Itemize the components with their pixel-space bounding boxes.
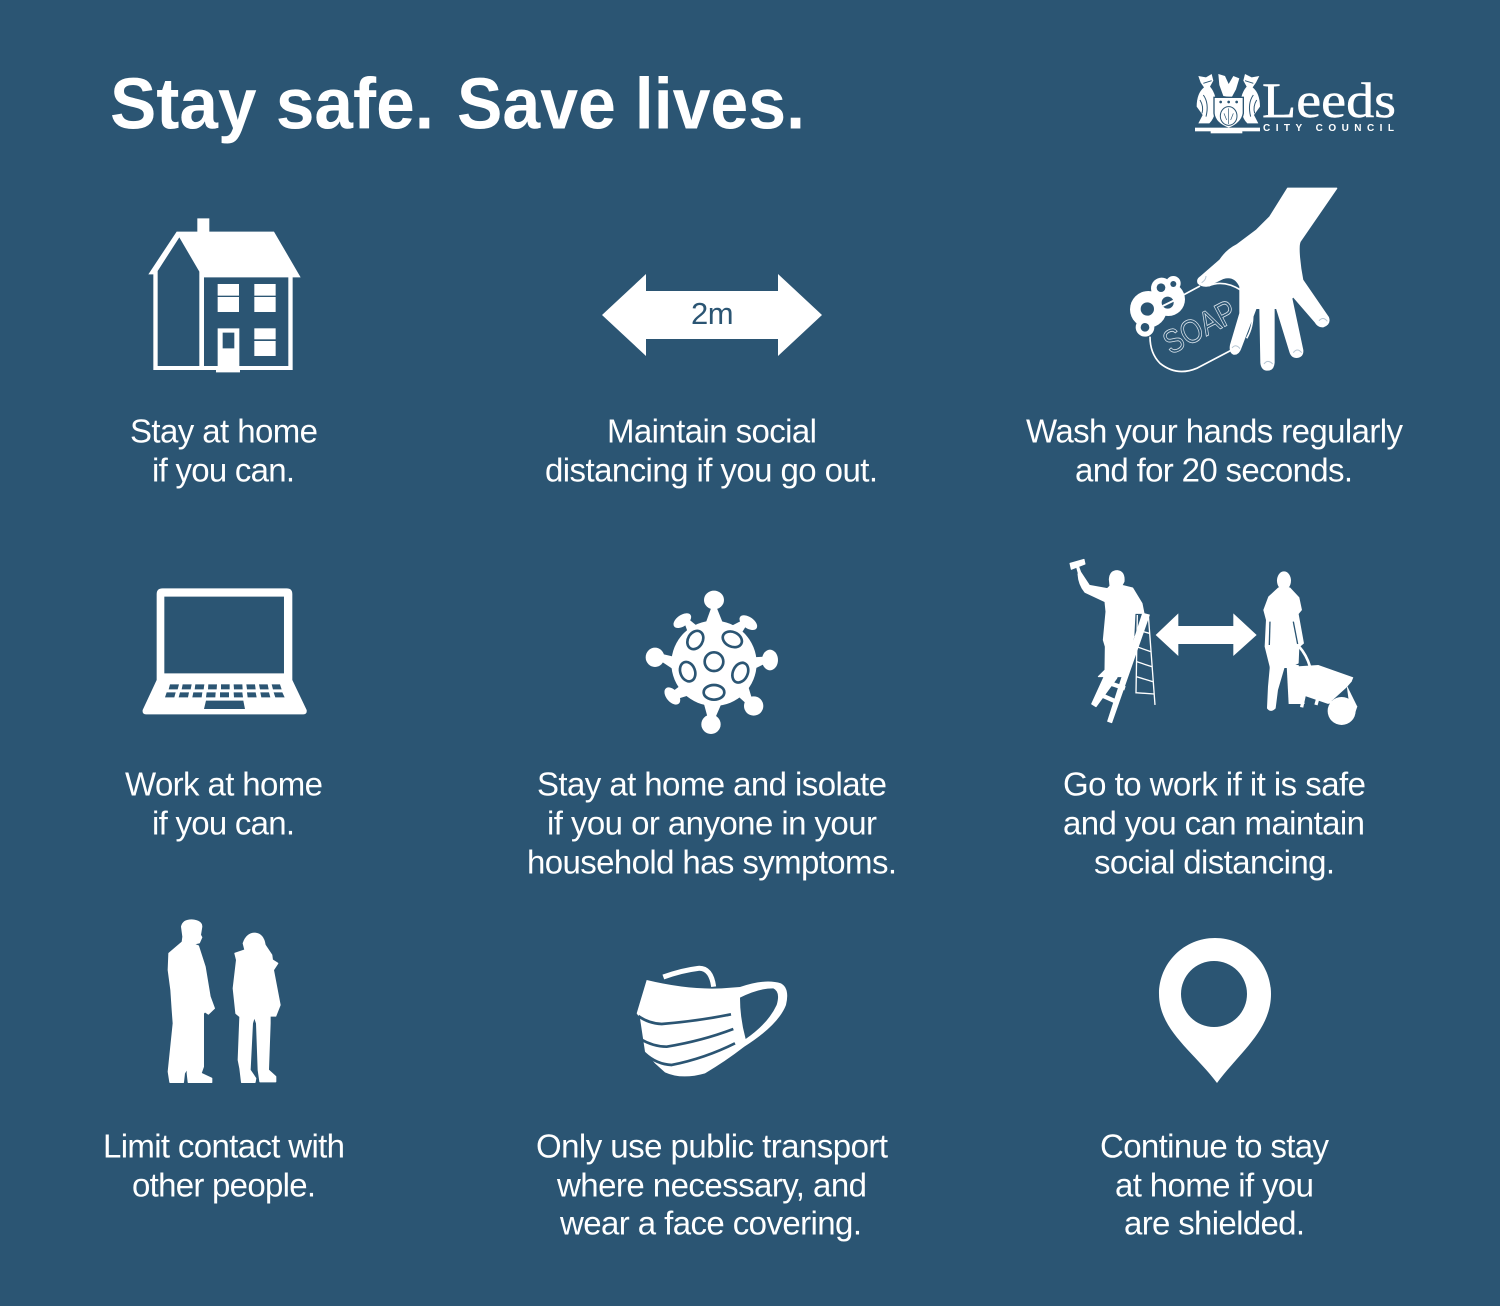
caption [1026,412,1404,488]
caption: at home if you [1115,1166,1314,1204]
caption: Limit contact with [103,1128,345,1164]
icon: hand with soap [1130,188,1337,372]
title: Stay safe. [110,64,434,144]
caption [103,1128,345,1204]
caption: Stay at home and isolate [537,766,887,802]
icon: workers keeping distance [1070,559,1357,725]
icon: double arrow [1156,613,1257,656]
caption: if you can. [152,804,295,842]
caption: Wash your hands regularly [1026,412,1404,450]
caption: where necessary, and [556,1166,867,1204]
panel: social distancing [545,274,878,488]
caption [125,766,323,842]
caption [545,412,878,488]
icon: 2m double arrow [602,274,822,356]
icon: virus [646,591,778,734]
caption: other people. [132,1166,316,1204]
logo: Leeds City Council [1195,72,1396,134]
caption: are shielded. [1124,1204,1305,1242]
caption: Go to work if it is safe [1063,766,1366,802]
icon: 2m double arrow: 2m [691,296,733,331]
caption: wear a face covering. [559,1204,862,1242]
panel: public transport [536,968,888,1242]
caption: social distancing. [1094,844,1335,880]
caption: household has symptoms. [527,844,897,880]
soap label: SOAP [1157,293,1243,362]
icon: gardener with wheelbarrow [1263,571,1357,725]
icon: face mask [637,968,787,1076]
logo wordmark: Leeds [1262,72,1396,128]
caption: Only use public transport [536,1128,888,1164]
caption: Stay at home [130,412,318,450]
caption: Continue to stay [1100,1128,1330,1164]
panel: stay at home [130,218,318,488]
panel: isolate with symptoms [527,591,897,880]
logo subtitle: CITY COUNCIL [1263,123,1394,134]
caption: if you or anyone in your [547,804,877,842]
caption: if you can. [152,452,295,488]
icon: house [148,218,301,372]
panel: work at home [125,588,323,842]
panel: shielded [1100,938,1330,1242]
panel: wash hands [1026,188,1404,488]
caption: Maintain social [607,412,817,450]
caption: distancing if you go out. [545,452,878,488]
panel: limit contact [103,920,345,1204]
icon: laptop [143,588,307,714]
caption [527,766,897,880]
caption [536,1128,888,1242]
caption [130,412,318,488]
title: Save lives. [457,64,805,144]
caption [1063,766,1366,880]
caption [1100,1128,1330,1242]
caption: and for 20 seconds. [1075,452,1353,488]
icon: painter on ladder [1070,559,1155,723]
icon: two people [168,920,280,1082]
icon: map pin [1159,938,1271,1083]
panel: go to work [1063,559,1366,880]
icon: coat of arms [1195,74,1260,133]
caption: and you can maintain [1063,804,1365,842]
title [110,64,805,144]
caption: Work at home [125,766,323,802]
